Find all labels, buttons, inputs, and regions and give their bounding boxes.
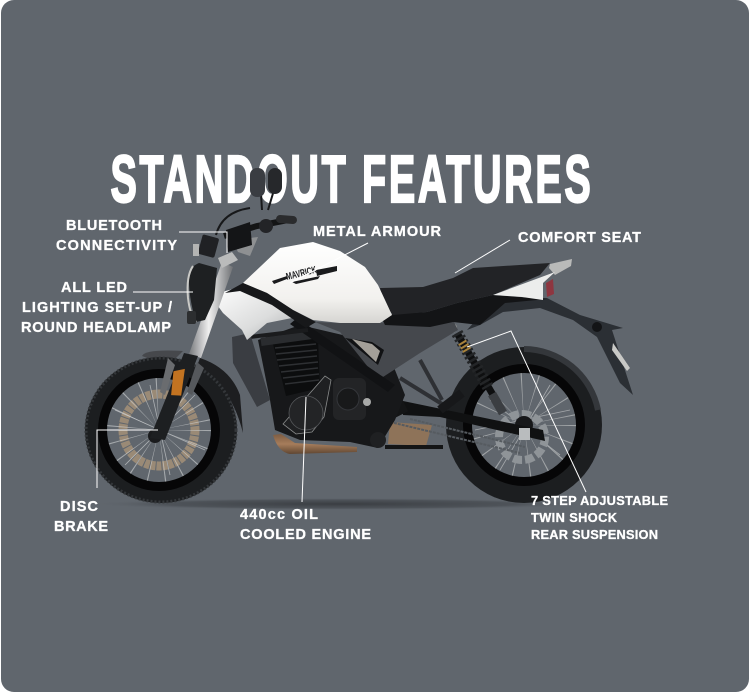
callout: rear suspension: TWIN SHOCK (531, 510, 618, 525)
headlamp (187, 263, 217, 324)
tank logo (272, 265, 337, 284)
tail section (493, 259, 572, 300)
ground shadow (90, 498, 590, 510)
front wheel (85, 357, 237, 503)
copper heat shield (388, 422, 432, 446)
front fender (142, 351, 243, 433)
white side panel (210, 288, 297, 340)
rear fender and number plate (467, 297, 633, 395)
fuel tank (243, 242, 392, 323)
side frame panel (250, 318, 458, 392)
handlebar and controls (193, 208, 293, 268)
callout: comfort seat: COMFORT SEAT (518, 230, 641, 246)
callout: engine (240, 397, 371, 543)
callout: rear suspension: REAR SUSPENSION (531, 527, 658, 542)
callout: LED lighting: ROUND HEADLAMP (21, 320, 171, 336)
callout: disc brake: BRAKE (54, 519, 108, 535)
callout: engine: 440cc OIL (240, 507, 318, 523)
radiator shroud (232, 333, 270, 407)
callout: LED lighting (21, 280, 193, 336)
mirrors (250, 168, 282, 210)
swingarm and chain (390, 401, 545, 453)
motorcycle illustration (85, 168, 633, 503)
seat (380, 263, 550, 315)
callout: rear suspension (467, 331, 668, 542)
callout: rear suspension: 7 STEP ADJUSTABLE (531, 493, 668, 508)
callout: LED lighting: LIGHTING SET-UP / (22, 300, 172, 316)
engine block (258, 325, 405, 448)
callout: metal armour: METAL ARMOUR (313, 224, 442, 240)
callout: metal armour (290, 224, 442, 283)
callout: bluetooth connectivity: CONNECTIVITY (56, 238, 177, 254)
callout: LED lighting: ALL LED (61, 280, 127, 296)
foot controls and struts (375, 360, 462, 447)
callout: disc brake: DISC (60, 499, 99, 515)
exhaust pipe (273, 434, 357, 454)
under-seat subframe (380, 295, 547, 327)
tank logo: MAVRICK (285, 265, 318, 283)
callout: comfort seat (455, 230, 641, 273)
callout: bluetooth connectivity (56, 218, 227, 254)
title: STANDOUT FEATURES (110, 141, 591, 217)
rear wheel (446, 347, 602, 503)
callout: engine: COOLED ENGINE (240, 527, 371, 543)
callout: bluetooth connectivity: BLUETOOTH (66, 218, 162, 234)
front fork (150, 262, 233, 440)
rear shock absorber (447, 323, 503, 413)
callout: disc brake (54, 430, 158, 535)
